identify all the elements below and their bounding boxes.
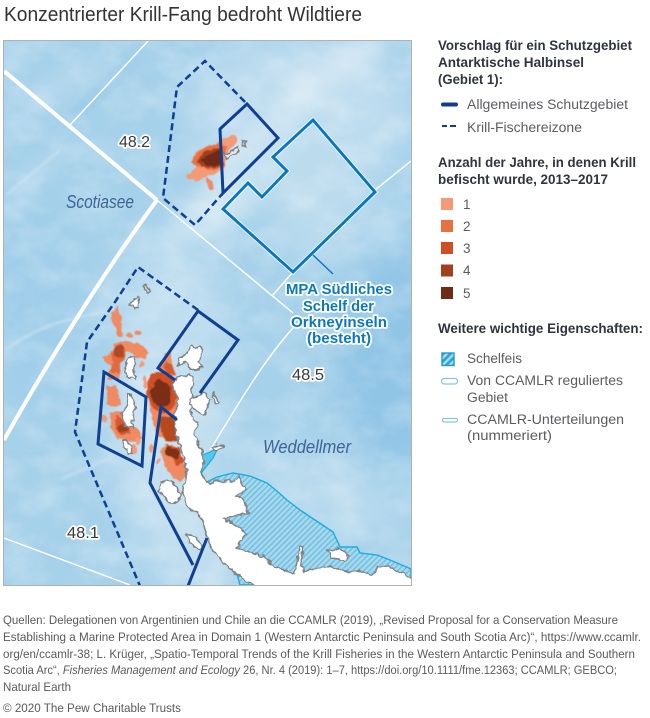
- legend: proposal: [438, 38, 632, 135]
- Krill fishery zone, area 48.2 (dashed): [163, 61, 245, 225]
- label: MPA South Orkney: Orkneyinseln: [291, 314, 387, 331]
- legend heading: proposal: (Gebiet 1):: [438, 72, 503, 87]
- krill fishing patches, area 48.2: [187, 136, 237, 192]
- legend text: krill fishery zone: Krill-Fischereizone: [467, 120, 582, 135]
- label: MPA South Orkney: Schelf der: [303, 298, 374, 315]
- legend swatch: general protected zone: [443, 102, 456, 106]
- legend text: CCAMLR regulated area: Gebiet: [467, 390, 508, 405]
- legend text: general protected zone: Allgemeines Schutzgebiet: [467, 97, 628, 112]
- legend item: 5 years: 5: [463, 286, 471, 301]
- small ice shelf near peninsula tip: [201, 450, 218, 473]
- legend swatch: krill fishery zone: [442, 125, 456, 127]
- map panel: [3, 40, 412, 586]
- label: Scotiasee: Scotiasee: [66, 192, 134, 212]
- label: MPA South Orkney: MPA Südliches: [286, 281, 392, 298]
- legend swatch: CCAMLR regulated area: [442, 378, 458, 384]
- ocean background: [4, 41, 411, 585]
- label: 48.5: 48.5: [292, 367, 324, 384]
- legend text: CCAMLR subdivisions: CCAMLR-Unterteilungen: [467, 412, 624, 427]
- islands: [327, 549, 349, 560]
- ice shelf: [207, 473, 411, 585]
- legend text: CCAMLR regulated area: [467, 373, 623, 405]
- legend heading: other features: Weitere wichtige Eigenschaften:: [438, 321, 643, 336]
- label: 48.1: 48.1: [67, 525, 99, 542]
- legend heading: years: befischt wurde, 2013–2017: [438, 172, 608, 187]
- copyright: © 2020 The Pew Charitable Trusts: [3, 701, 181, 715]
- legend heading: proposal: Antarktische Halbinsel: [438, 55, 584, 70]
- legend item: 4 years: [441, 263, 471, 278]
- sources text: Establishing a Marine Protected Area in Domain 1 (Western Antarctic Peninsula and South Scotia Arc)“, https://www.ccamlr.: [3, 630, 641, 644]
- legend swatch: CCAMLR subdivisions: [442, 418, 458, 422]
- Krill fishery zone, area 48.1 (dashed): [75, 267, 198, 586]
- legend text: ice shelf: Schelfeis: [467, 351, 522, 366]
- legend item: 3 years: 3: [463, 241, 471, 256]
- krill fishing patches, area 48.1: [102, 306, 186, 482]
- legend item: 1 year: [441, 197, 471, 212]
- legend item: 3 years: [441, 241, 471, 256]
- sources text: Natural Earth: [3, 680, 71, 694]
- legend item: 5 years: [441, 286, 471, 301]
- legend item: 2 years: [441, 219, 471, 234]
- legend heading: years: Anzahl der Jahre, in denen Krill: [438, 155, 636, 170]
- legend item: 1 year: 1: [463, 197, 471, 212]
- legend item: 4 years: 4: [463, 263, 471, 278]
- legend: other features: [438, 321, 643, 443]
- legend text: CCAMLR subdivisions: [467, 412, 624, 443]
- legend text: CCAMLR subdivisions: (nummeriert): [467, 428, 552, 443]
- label: MPA South Orkney: (besteht): [307, 330, 371, 347]
- title: Konzentrierter Krill-Fang bedroht Wildtiere: [4, 4, 362, 26]
- legend swatch: ice shelf: [442, 353, 454, 366]
- CCAMLR subdivision lines: [4, 41, 411, 585]
- General protected zone, area 48.2: [220, 104, 278, 193]
- sources text: Quellen: Delegationen von Argentinien und Chile an die CCAMLR (2019), „Revised Proposal for a Conservation Measure: [3, 613, 618, 627]
- Antarctic Peninsula land: [121, 141, 414, 590]
- sources text: Scotia Arc“, Fisheries Management and Ecology 26, Nr. 4 (2019): 1–7, https://doi.org/10.1111/fme.12363; CCAMLR; GEBCO;: [3, 663, 617, 677]
- sources text: org/en/ccamlr-38; L. Krüger, „Spatio-Temporal Trends of the Krill Fisheries in the Western Antarctic Peninsula and Southern: [3, 647, 635, 661]
- legend heading: proposal: Vorschlag für ein Schutzgebiet: [438, 38, 632, 53]
- label: 48.2: 48.2: [119, 134, 150, 151]
- Existing MPA South Orkney Islands: [223, 120, 375, 274]
- General protected zones, area 48.1: [98, 311, 238, 586]
- label: MPA South Orkney: [286, 281, 392, 347]
- legend item: 2 years: 2: [463, 219, 471, 234]
- legend heading: proposal: [438, 38, 632, 87]
- label: Weddellmeer: Weddellmer: [263, 437, 352, 457]
- sources text: [3, 613, 641, 694]
- legend text: CCAMLR regulated area: Von CCAMLR reguliertes: [467, 373, 623, 388]
- legend: krill fishing years: [438, 155, 636, 301]
- legend heading: years: [438, 155, 636, 187]
